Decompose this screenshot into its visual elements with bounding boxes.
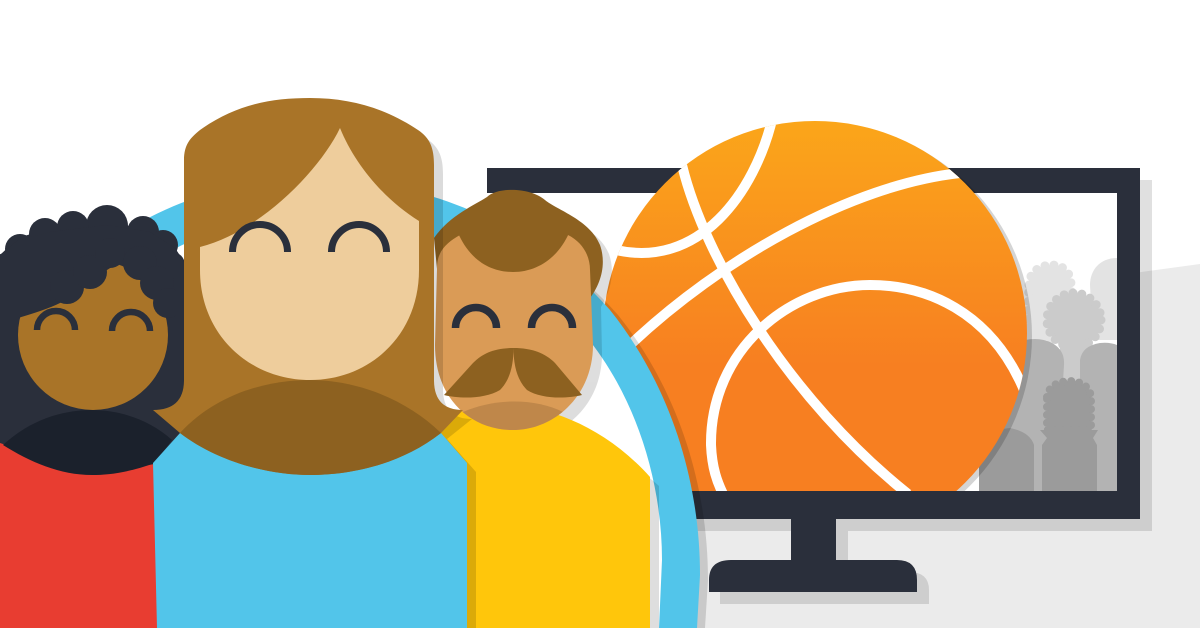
girl eye right bbox=[112, 312, 150, 331]
man hair back bbox=[434, 190, 603, 300]
girl neck bbox=[3, 410, 172, 475]
woman eye left bbox=[232, 224, 288, 252]
background grey floor bbox=[680, 264, 1200, 628]
woman body bbox=[153, 433, 467, 628]
woman neck bbox=[180, 380, 441, 475]
monitor shadow bbox=[499, 180, 1152, 604]
man fringe bbox=[458, 233, 569, 272]
woman shadow bbox=[193, 107, 476, 628]
ball seams bbox=[612, 120, 1024, 496]
ball shadow bbox=[926, 152, 1032, 491]
girl eye left bbox=[37, 311, 75, 330]
basketball bbox=[605, 121, 1027, 491]
girl face bbox=[18, 260, 168, 410]
man moustache bbox=[444, 348, 582, 398]
girl body bbox=[0, 440, 160, 628]
monitor frame bbox=[487, 168, 1140, 592]
woman eye right bbox=[332, 224, 386, 252]
girl hairline bbox=[0, 225, 184, 318]
girl hair curls bbox=[0, 205, 185, 283]
monitor screen bbox=[487, 193, 1117, 491]
man neck shade bbox=[463, 402, 563, 430]
middle bodies bbox=[1004, 339, 1117, 491]
monitor bbox=[487, 168, 1140, 592]
blue ring bbox=[0, 178, 700, 628]
man body bbox=[438, 405, 650, 628]
ring shadow bbox=[0, 185, 708, 628]
back row bbox=[1027, 258, 1117, 340]
white circle interior bbox=[0, 215, 662, 628]
woman face bbox=[200, 128, 419, 380]
girl bbox=[0, 205, 185, 628]
man face bbox=[435, 235, 593, 430]
front bodies bbox=[979, 381, 1098, 491]
man eye left bbox=[456, 307, 496, 328]
man bbox=[434, 190, 650, 628]
man shadow bbox=[444, 199, 659, 628]
middle head bbox=[1042, 288, 1106, 381]
crowd silhouettes bbox=[979, 258, 1117, 491]
man eye right bbox=[532, 307, 572, 328]
woman bbox=[153, 98, 467, 628]
girl hair base bbox=[0, 222, 184, 474]
ball body bbox=[605, 121, 1027, 491]
woman hair bbox=[153, 98, 463, 475]
